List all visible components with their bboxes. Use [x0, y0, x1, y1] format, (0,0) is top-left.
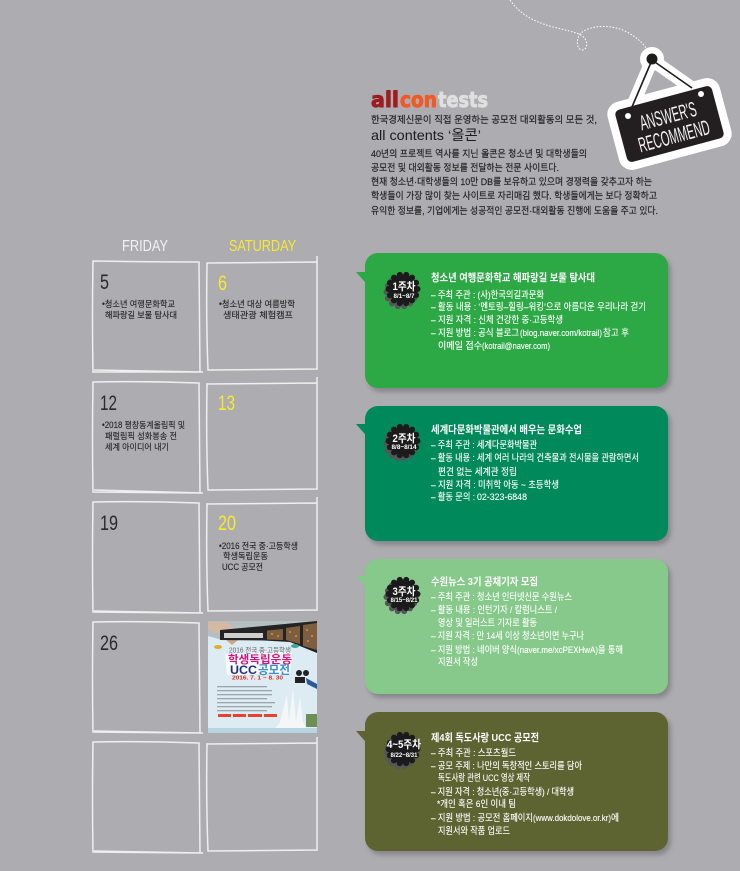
week 1 text: 참고 후 [603, 328, 629, 339]
calendar cell: 5: •청소년 여행문화학교 [102, 298, 175, 309]
panel: week 4-5 [356, 712, 671, 855]
week 4-5 text: – 주최 주관 : 스포츠월드 [431, 747, 516, 759]
badge: week 4-5: 8/22~8/31 [390, 753, 418, 759]
calendar cell: bottom left [92, 742, 203, 853]
dotted string [510, 0, 646, 50]
badge: week 3: 8/15~8/21 [390, 598, 418, 604]
week 3 text: – 지원 자격 : 만 14세 이상 청소년이면 누구나 [431, 630, 584, 642]
calendar cell: 26 [92, 622, 203, 733]
calendar cell: 13 [207, 377, 317, 490]
poster: UCC contest: 학생독립운동 [228, 652, 292, 666]
week 3 text: – 지원 방법 : 네이버 양식 [431, 645, 517, 656]
calendar cell: 19 [92, 502, 203, 613]
poster: UCC contest [208, 621, 317, 733]
panel: week 3 [356, 559, 671, 698]
week 4-5 text: 독도사랑 관련 UCC 영상 제작 [438, 772, 530, 784]
logo: allcontests: con [400, 88, 437, 112]
badge: week 1: 8/1~8/7 [394, 294, 415, 300]
week 2 text: 세계다문화박물관에서 배우는 문화수업 [431, 423, 582, 436]
week 1 text: (blog.naver.com/kotrail) [520, 328, 602, 339]
badge: week 4-5: 4~5주차 [387, 738, 421, 751]
badge: week 2 [386, 426, 418, 458]
calendar cell: 12: •2018 평창동계올림픽 및 [102, 419, 185, 430]
panel: week 1 [356, 253, 671, 392]
calendar day headers [122, 238, 296, 255]
week 3 text [431, 575, 623, 668]
week 3 text: – 활동 내용 : 인턴기자 / 칼럼니스트 / [431, 604, 557, 616]
intro heading [371, 114, 597, 143]
week 4-5 text: *개인 혹은 6인 이내 팀 [437, 798, 516, 810]
calendar cell: 6: 생태관광 체험캠프 [223, 309, 293, 320]
calendar cell: 12: 12 [100, 392, 117, 415]
calendar cell: 6 [207, 256, 317, 370]
panel: week 2 [356, 406, 671, 545]
week 3 text: 영상 및 일러스트 기자로 활동 [438, 617, 537, 629]
week 2 text: 편견 없는 세계관 정립 [438, 466, 517, 478]
hanging sign: Answer's Recommend [614, 47, 725, 163]
calendar cell: 5: 5 [100, 271, 109, 294]
poster: UCC contest: UCC [230, 663, 257, 677]
calendar day headers: FRIDAY [122, 238, 168, 255]
calendar cell: 20: 학생독립운동 [223, 551, 268, 561]
week 4-5 text: – 지원 자격 : 청소년(중·고등학생) / 대학생 [431, 786, 574, 798]
calendar cell: 20 [207, 497, 317, 611]
calendar cell: 13: 13 [218, 392, 235, 415]
intro paragraph [371, 148, 658, 217]
calendar cell: 20: •2016 전국 중·고등학생 [219, 541, 298, 551]
calendar cell: bottom right [207, 737, 317, 851]
badge: week 2: 2주차 [392, 432, 416, 445]
week 3 text: 수원뉴스 3기 공채기자 모집 [431, 575, 538, 588]
week 4-5 text: 지원서와 작품 업로드 [438, 825, 510, 837]
calendar cell: 19: 19 [100, 512, 118, 535]
intro paragraph: 40년의 프로젝트 역사를 지닌 올콘은 청소년 및 대학생들의 [371, 148, 587, 160]
week 4-5 text: – 지원 방법 : 공모전 홈페이지 [431, 812, 533, 824]
week 3 text: 지원서 작성 [438, 657, 478, 668]
week 1 text: – 활동 내용 : ‘멘토링–힐링–워킹’으로 아름다운 우리나라 걷기 [431, 301, 646, 313]
calendar cell: 12: 패럴림픽 성화봉송 전 [105, 430, 177, 441]
badge: week 2: 8/8~8/14 [392, 445, 417, 451]
week 1 text: – 지원 자격 : 신체 건강한 중·고등학생 [431, 314, 563, 326]
week 3 text: (naver.me/xcPEXHwA) [517, 645, 598, 656]
intro paragraph: 공모전 및 대외활동 정보를 전달하는 전문 사이트다. [371, 162, 559, 174]
calendar cell: 5 [92, 261, 203, 372]
badge: week 4-5 [386, 734, 421, 766]
badge: week 1 [386, 274, 418, 306]
poster: UCC contest: 2016. 7. 1 ~ 8. 30 [232, 676, 283, 682]
week 4-5 text: 제4회 독도사랑 UCC 공모전 [431, 731, 539, 744]
week 2 text: – 지원 자격 : 미취학 아동 ~ 초등학생 [431, 479, 559, 491]
week 4-5 text: (www.dokdolove.or.kr) [533, 813, 611, 824]
calendar cell: 6: •청소년 대상 여름방학 [219, 298, 295, 309]
calendar cell: 12 [92, 382, 203, 493]
calendar day headers: SATURDAY [229, 238, 296, 255]
week 3 text: – 주최 주관 : 청소년 인터넷신문 수원뉴스 [431, 592, 572, 603]
week 2 text [431, 423, 639, 503]
week 1 text: – 지원 방법 : 공식 블로그 [431, 328, 519, 339]
week 4-5 text [431, 731, 619, 837]
logo: allcontests: tests [438, 88, 488, 112]
week 1 text: (kotrail@naver.com) [482, 341, 550, 352]
calendar cell: 6: 6 [218, 272, 227, 295]
intro heading: 한국경제신문이 직접 운영하는 공모전 대외활동의 모든 것, [371, 114, 597, 126]
logo: allcontests: all [371, 88, 399, 112]
intro paragraph: 학생들이 가장 많이 찾는 사이트로 자리매김 했다. 학생들에게는 보다 정확하고 [371, 190, 657, 202]
intro heading: all contents ‘올콘’ [371, 127, 481, 143]
badge: week 1: 1주차 [392, 280, 416, 293]
week 3 text: 을 통해 [598, 644, 623, 656]
week 1 text: 이메일 접수 [438, 340, 482, 352]
intro paragraph: 유익한 정보를, 기업에게는 성공적인 공모전·대외활동 진행에 도움을 주고 있다. [371, 205, 658, 217]
calendar cell: 20: 20 [218, 512, 236, 535]
week 4-5 text: 에 [611, 813, 619, 824]
week 2 text: 02-323-6848 [477, 492, 527, 503]
week 2 text: – 주최 주관 : 세계다문화박물관 [431, 439, 537, 451]
badge: week 3: 3주차 [392, 585, 416, 598]
badge: week 3 [386, 580, 418, 612]
week 4-5 text: – 공모 주제 : 나만의 독창적인 스토리를 담아 [431, 760, 582, 772]
week 1 text [431, 271, 646, 352]
calendar cell: 12: 세계 아이디어 내기 [105, 441, 169, 452]
week 1 text: – 주최 주관 : (사)한국의길과문화 [431, 289, 544, 301]
week 1 text: 청소년 여행문화학교 해파랑길 보물 탐사대 [431, 271, 595, 284]
calendar cell: 5: 해파랑길 보물 탐사대 [105, 309, 177, 320]
calendar cell: 26: 26 [100, 632, 118, 655]
week 2 text: – 활동 문의 : [431, 491, 475, 503]
logo: allcontests [371, 88, 488, 112]
poster: UCC contest: 공모전 [258, 663, 290, 677]
week 2 text: – 활동 내용 : 세계 여러 나라의 건축물과 전시물을 관람하면서 [431, 452, 639, 464]
intro paragraph: 현재 청소년·대학생들의 10만 DB를 보유하고 있으며 경쟁력을 갖추고자 하는 [371, 176, 652, 188]
poster: UCC contest: 2016 전국 중·고등학생 [229, 646, 291, 654]
calendar cell: 20: UCC 공모전 [222, 562, 263, 572]
